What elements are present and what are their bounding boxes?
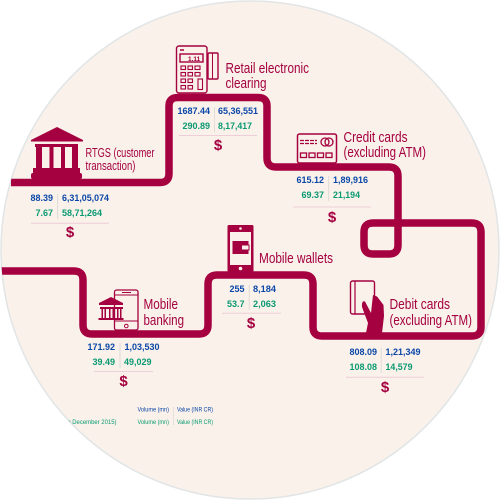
- figures: Retail: 290.89: [182, 121, 210, 131]
- label: RTGS: transaction): [86, 159, 136, 173]
- label: RTGS: [86, 146, 154, 173]
- label: Mobile banking: banking: [144, 312, 184, 329]
- figures: Mobile banking: 49,029: [124, 357, 152, 367]
- label: Retail electronic clearing: [226, 60, 309, 92]
- figures: Mobile banking: $: [119, 373, 128, 390]
- panel: Mobile banking: [87, 290, 184, 390]
- label: Debit cards: (excluding ATM): [390, 312, 472, 329]
- figures: RTGS: 58,71,264: [62, 208, 102, 218]
- figures: Mobile wallets: 53.7: [227, 299, 244, 309]
- figures: Retail: 1687.44: [177, 106, 210, 116]
- figures: RTGS: 7.67: [35, 208, 53, 218]
- figures: Mobile wallets: [222, 284, 281, 332]
- figures: Retail: 8,17,417: [218, 121, 252, 131]
- figures: Debit cards: 14,579: [386, 362, 412, 372]
- panel: Credit cards: [293, 129, 426, 226]
- screen reading: 1.11: [188, 56, 201, 63]
- figures: Debit cards: 108.08: [349, 362, 377, 372]
- figures: Debit cards: 808.09: [349, 347, 377, 357]
- figures: Mobile banking: [87, 342, 160, 390]
- figures: Mobile wallets: $: [247, 315, 256, 332]
- icon: credit card: [298, 134, 336, 163]
- panel: Mobile wallets: [222, 225, 333, 332]
- label: Mobile wallets: Mobile wallets: [259, 250, 333, 267]
- figures: Credit cards: 69.37: [301, 190, 324, 200]
- figures: Credit cards: 615.12: [296, 175, 324, 185]
- figures: Mobile wallets: 8,184: [253, 284, 276, 294]
- icon: POS terminal: [176, 46, 218, 93]
- label: Debit cards: [390, 296, 472, 329]
- figures: Retail: [177, 106, 258, 154]
- legend: Value (INR CR): [177, 408, 213, 414]
- figures: Credit cards: $: [328, 209, 337, 226]
- legend: Volume (mn): [138, 420, 169, 426]
- panel: RTGS: [30, 127, 154, 241]
- figures: Credit cards: 1,89,916: [333, 175, 368, 185]
- legend: Value (INR CR): [177, 420, 213, 426]
- figures: Credit cards: [293, 175, 371, 226]
- figures: Mobile wallets: 255: [229, 284, 244, 294]
- label: Credit cards: [344, 129, 426, 161]
- figures: Mobile banking: 171.92: [87, 342, 115, 352]
- icon: phone and bank: [98, 290, 138, 330]
- figures: Mobile banking: 39.49: [92, 357, 115, 367]
- figures: Retail: $: [214, 137, 223, 154]
- figures: RTGS: 6,31,05,074: [62, 193, 109, 203]
- flow line: [1, 98, 481, 336]
- figures: Credit cards: 21,194: [333, 190, 360, 200]
- figures: Retail: 65,36,551: [218, 106, 258, 116]
- icon: phone with wallet: [228, 225, 254, 272]
- label: Mobile banking: Mobile: [144, 296, 178, 313]
- label: Debit cards: Debit cards: [390, 296, 450, 313]
- label: Credit cards: Credit cards: [344, 129, 408, 146]
- legend: in December 2015): [66, 420, 116, 426]
- label: Retail electronic clearing: Retail electronic: [226, 60, 309, 77]
- figures: Mobile banking: 1,03,530: [124, 342, 160, 352]
- figures: Debit cards: 1,21,349: [386, 347, 420, 357]
- figures: Mobile wallets: 2,063: [253, 299, 276, 309]
- icon: bank: [31, 127, 83, 179]
- icon: hand holding card: [350, 281, 384, 333]
- figures: Debit cards: $: [381, 379, 390, 396]
- figures: Debit cards: [346, 347, 424, 396]
- legend: [66, 407, 213, 426]
- figures: RTGS: 88.39: [30, 193, 53, 203]
- panel: Debit cards: [346, 281, 472, 396]
- label: Mobile banking: [144, 296, 184, 329]
- legend: Volume (mn): [138, 408, 169, 414]
- label: RTGS: RTGS (customer: [86, 146, 154, 160]
- figures: RTGS: $: [66, 224, 75, 241]
- label: Credit cards: (excluding ATM): [344, 144, 426, 161]
- label: Retail electronic clearing: clearing: [226, 75, 266, 92]
- panel: Retail electronic clearing: [176, 46, 309, 154]
- figures: RTGS: [30, 193, 109, 241]
